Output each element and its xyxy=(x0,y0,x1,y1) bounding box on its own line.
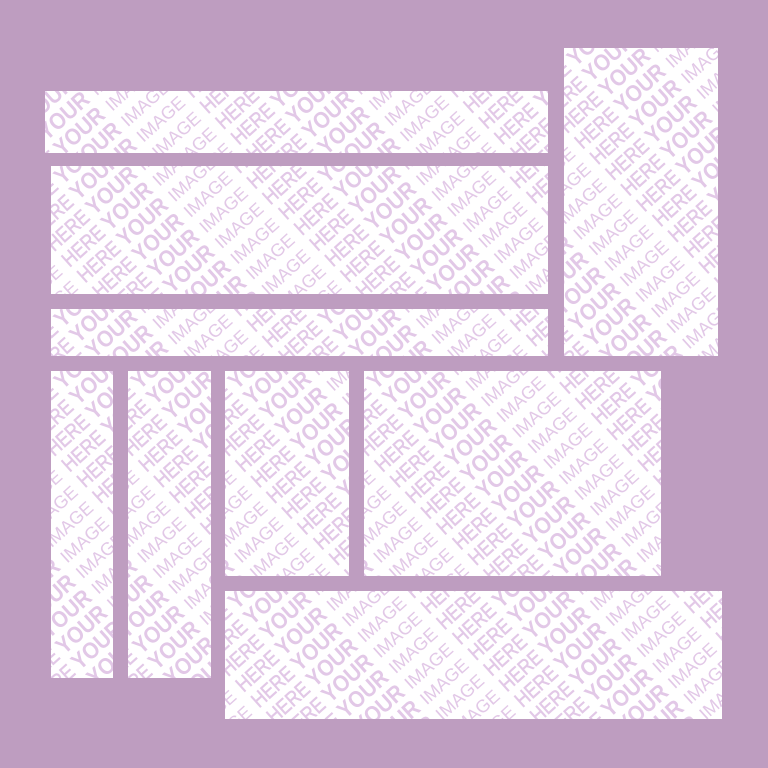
panel: image placeholder 8 (right block): YOUR xyxy=(471,444,533,503)
panel: image placeholder 4 (top right tall): YOUR xyxy=(655,105,717,164)
panel: image placeholder 4 (top right tall): HERE xyxy=(586,119,638,169)
panel: image placeholder 8 (right block): YOUR xyxy=(533,506,595,565)
panel: image placeholder 8 (right block): YOUR xyxy=(455,428,517,487)
panel: image placeholder 2 (large wide): IMAGE xyxy=(490,214,547,267)
panel: image placeholder 2 (large wide): YOUR xyxy=(127,207,188,267)
panel: image placeholder 4 (top right tall): HERE xyxy=(602,134,654,185)
panel: image placeholder 9 (bottom wide): YOUR xyxy=(564,632,626,691)
panel: image placeholder 7 (middle block) xyxy=(225,371,349,576)
panel: image placeholder 9 (bottom wide): YOUR xyxy=(301,632,362,692)
panel: image placeholder 7 (middle block): YOUR xyxy=(285,397,347,456)
panel: image placeholder 8 (right block): IMAGE xyxy=(540,419,596,473)
panel: image placeholder 8 (right block): YOUR xyxy=(440,412,501,472)
panel: image placeholder 8 (right block): HERE xyxy=(386,442,438,492)
panel: image placeholder 8 (right block): IMAGE xyxy=(524,404,580,457)
panel: image placeholder 2 (large wide): YOUR xyxy=(96,176,157,236)
panel: image placeholder 9 (bottom wide): YOUR xyxy=(533,601,595,660)
panel: image placeholder 2 (large wide): IMAGE xyxy=(242,230,299,284)
panel: image placeholder 8 (right block): IMAGE xyxy=(508,388,565,442)
panel: image placeholder 4 (top right tall): IMAGE xyxy=(647,268,704,322)
panel: image placeholder 9 (bottom wide): YOUR xyxy=(316,648,378,707)
panel: image placeholder 9 (bottom wide): IMAGE xyxy=(617,592,674,646)
panel: image placeholder 8 (right block): HERE xyxy=(587,379,639,430)
panel: image placeholder 2 (large wide): IMAGE xyxy=(443,167,500,221)
panel: image placeholder 1 (top wide) xyxy=(45,91,548,153)
panel: image placeholder 2 (large wide): HERE xyxy=(337,237,389,287)
panel: image placeholder 8 (right block) xyxy=(364,371,661,576)
panel: image placeholder 4 (top right tall): HERE xyxy=(570,103,623,154)
panel: image placeholder 8 (right block): IMAGE xyxy=(586,466,643,520)
panel: image placeholder 7 (middle block): YOUR xyxy=(270,381,331,441)
panel: image placeholder 8 (right block): HERE xyxy=(448,504,501,555)
panel: image placeholder 8 (right block): IMAGE xyxy=(369,513,426,567)
panel: image placeholder 1 (top wide): HERE xyxy=(491,99,543,149)
panel: image placeholder 2 (large wide): IMAGE xyxy=(180,168,236,221)
panel: image placeholder 4 (top right tall): YOUR xyxy=(579,292,640,352)
panel: image placeholder 9 (bottom wide): YOUR xyxy=(549,616,610,676)
panel: image placeholder 6 (second column): HERE xyxy=(134,426,187,477)
panel: image placeholder 2 (large wide): HERE xyxy=(274,174,326,225)
panel: image placeholder 7 (middle block): HERE xyxy=(294,489,346,539)
panel: image placeholder 9 (bottom wide): IMAGE xyxy=(354,593,410,646)
panel: image placeholder 2 (large wide): IMAGE xyxy=(475,198,531,252)
panel: image placeholder 4 (top right tall) xyxy=(564,48,718,356)
panel: image placeholder 9 (bottom wide): IMAGE xyxy=(401,639,457,693)
panel: image placeholder 5 (left column) xyxy=(51,371,113,678)
panel: image placeholder 9 (bottom wide): IMAGE xyxy=(664,639,721,692)
panel: image placeholder 8 (right block): HERE xyxy=(433,489,485,539)
panel: image placeholder 2 (large wide): IMAGE xyxy=(211,199,267,252)
panel: image placeholder 4 (top right tall): IMAGE xyxy=(585,206,641,259)
panel: image placeholder 8 (right block): YOUR xyxy=(409,381,470,441)
panel: image placeholder 7 (middle block): HERE xyxy=(278,473,330,523)
panel: image placeholder 7 (middle block): IMAGE xyxy=(230,513,287,567)
panel: image placeholder 3 (narrow wide strip) xyxy=(51,309,548,356)
panel: image placeholder 9 (bottom wide): IMAGE xyxy=(649,623,705,677)
panel: image placeholder 9 (bottom wide): YOUR xyxy=(270,601,331,661)
panel: image placeholder 9 (bottom wide): IMAGE xyxy=(633,608,689,661)
panel: image placeholder 2 (large wide): IMAGE xyxy=(227,214,283,268)
panel: image placeholder 8 (right block): HERE xyxy=(370,426,423,477)
panel: image placeholder 6 (second column) xyxy=(128,371,211,678)
panel: image placeholder 2 (large wide): YOUR xyxy=(375,191,436,251)
panel: image placeholder 8 (right block): HERE xyxy=(603,395,655,445)
panel: image placeholder 6 (second column): YOUR xyxy=(143,615,204,675)
panel: image placeholder 8 (right block): IMAGE xyxy=(493,373,549,426)
panel: image placeholder 2 (large wide): HERE xyxy=(321,221,373,271)
panel: image placeholder 6 (second column): HERE xyxy=(150,442,202,492)
panel: image placeholder 4 (top right tall): YOUR xyxy=(564,277,625,336)
panel: image placeholder 9 (bottom wide): HERE xyxy=(464,615,516,665)
panel: image placeholder 2 (large wide): IMAGE xyxy=(195,183,252,237)
panel: image placeholder 1 (top wide): IMAGE xyxy=(133,92,189,146)
panel: image placeholder 8 (right block): IMAGE xyxy=(555,435,612,489)
panel: image placeholder 7 (middle block): HERE xyxy=(263,458,315,508)
panel: image placeholder 2 (large wide): YOUR xyxy=(406,223,468,282)
panel: image placeholder 9 (bottom wide): HERE xyxy=(495,646,547,696)
panel: image placeholder 9 (bottom wide): IMAGE xyxy=(385,624,441,677)
panel: image placeholder 9 (bottom wide): IMAGE xyxy=(369,608,426,662)
panel: image placeholder 6 (second column): IMAGE xyxy=(133,513,190,567)
panel: image placeholder 4 (top right tall): HERE xyxy=(648,181,700,232)
panel: image placeholder 4 (top right tall): HERE xyxy=(617,150,669,200)
panel: image placeholder 4 (top right tall): IMAGE xyxy=(616,237,673,291)
panel: image placeholder 7 (middle block): HERE xyxy=(231,426,284,477)
panel: image placeholder 1 (top wide): IMAGE xyxy=(396,92,453,146)
panel: image placeholder 4 (top right tall): YOUR xyxy=(640,89,701,149)
panel: image placeholder 8 (right block): YOUR xyxy=(502,475,564,534)
panel: image placeholder 2 (large wide) xyxy=(51,166,548,294)
panel: image placeholder 8 (right block): IMAGE xyxy=(602,482,658,535)
panel: image placeholder 8 (right block): HERE xyxy=(417,473,469,523)
panel: image placeholder 2 (large wide): YOUR xyxy=(359,176,421,235)
panel: image placeholder 4 (top right tall): IMAGE xyxy=(569,190,626,244)
panel: image placeholder 5 (left column): IMAGE xyxy=(56,513,113,567)
panel: image placeholder 9 (bottom wide): HERE xyxy=(511,662,563,712)
panel: image placeholder 2 (large wide): YOUR xyxy=(390,207,452,266)
panel: image placeholder 9 (bottom wide): YOUR xyxy=(285,617,347,676)
panel: image placeholder 9 (bottom wide): YOUR xyxy=(580,648,642,707)
panel: image placeholder 4 (top right tall): IMAGE xyxy=(632,252,688,306)
panel: image placeholder 8 (right block): YOUR xyxy=(486,459,548,519)
panel: image placeholder 4 (top right tall): HERE xyxy=(633,166,685,216)
panel: image placeholder 2 (large wide): IMAGE xyxy=(459,183,515,236)
panel: image placeholder 5 (left column): HERE xyxy=(57,426,110,477)
panel: image placeholder 2 (large wide): HERE xyxy=(57,221,110,272)
panel: image placeholder 2 (large wide): YOUR xyxy=(111,192,173,251)
panel: image placeholder 6 (second column): IMAGE xyxy=(149,529,205,582)
panel: image placeholder 9 (bottom wide): IMAGE xyxy=(416,655,473,709)
panel: image placeholder 6 (second column): YOUR xyxy=(128,600,189,659)
panel: image placeholder 8 (right block): IMAGE xyxy=(571,450,627,504)
panel: image placeholder 9 (bottom wide): HERE xyxy=(231,646,284,697)
panel: image placeholder 9 (bottom wide): HERE xyxy=(448,599,500,650)
panel: image placeholder 2 (large wide): HERE xyxy=(73,237,125,287)
panel: image placeholder 4 (top right tall): YOUR xyxy=(608,58,670,117)
panel: image placeholder 8 (right block): HERE xyxy=(402,458,454,508)
panel: image placeholder 8 (right block): HERE xyxy=(464,520,516,570)
panel: image placeholder 4 (top right tall): HERE xyxy=(664,197,716,247)
panel: image placeholder 8 (right block): YOUR xyxy=(518,490,579,550)
panel: image placeholder 2 (large wide): YOUR xyxy=(142,223,204,282)
panel: image placeholder 1 (top wide): HERE xyxy=(227,99,279,149)
panel: image placeholder 4 (top right tall): IMAGE xyxy=(663,284,718,337)
panel: image placeholder 2 (large wide): HERE xyxy=(305,205,358,256)
panel: image placeholder 7 (middle block): HERE xyxy=(247,442,299,492)
panel: image placeholder 5 (left column): YOUR xyxy=(51,600,112,659)
panel: image placeholder 9 (bottom wide): HERE xyxy=(247,662,299,712)
panel: image placeholder 9 (bottom wide): HERE xyxy=(479,630,532,681)
panel: image placeholder 2 (large wide): HERE xyxy=(290,190,342,240)
panel: image placeholder 9 (bottom wide) xyxy=(225,591,722,719)
panel: image placeholder 4 (top right tall): IMAGE xyxy=(601,221,657,275)
panel: image placeholder 4 (top right tall): YOUR xyxy=(624,74,686,133)
panel: image placeholder 8 (right block): YOUR xyxy=(424,397,486,456)
